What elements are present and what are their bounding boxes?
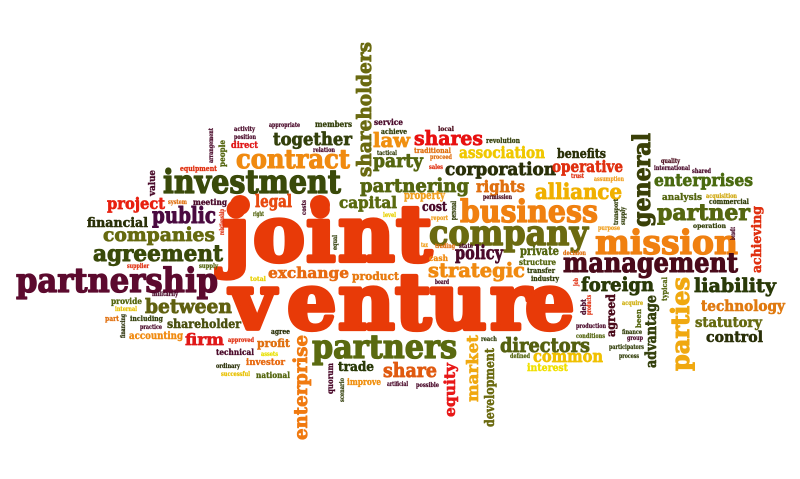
middle words: policy — [455, 242, 504, 264]
lower centre words: possible — [416, 382, 439, 389]
word: partners: partners — [312, 327, 457, 366]
right upper words: achieving — [750, 206, 765, 273]
right upper words: trust — [571, 173, 584, 180]
left words: between — [145, 294, 232, 318]
middle words: industry — [531, 274, 560, 283]
word: venture: venture — [228, 257, 575, 348]
upper centre words: rights — [476, 177, 525, 196]
left words: members — [315, 119, 352, 129]
upper centre words: shares — [414, 126, 483, 150]
left words: project — [107, 194, 166, 213]
left words: relationship — [219, 209, 226, 235]
left words: accounting — [129, 331, 183, 342]
upper centre words: traditional — [414, 146, 451, 155]
left words: financing — [120, 313, 127, 338]
left words: equipment — [180, 164, 218, 173]
left words: appropriate — [269, 122, 300, 129]
middle words: total — [250, 276, 267, 283]
left words: value — [148, 170, 158, 197]
left words: provide — [111, 296, 142, 306]
word: contract: contract — [236, 145, 350, 175]
left words — [87, 119, 352, 380]
right lower words: production — [576, 323, 607, 330]
right upper words: partner — [657, 200, 750, 226]
left words: assets — [261, 351, 279, 358]
left words: position — [234, 134, 257, 141]
middle words: cash — [429, 253, 448, 263]
middle words: equal — [332, 234, 339, 250]
lower centre words: development — [483, 348, 498, 427]
left words: technical — [216, 347, 254, 357]
right lower words: conditions — [576, 333, 606, 340]
right lower words: agreed — [604, 293, 618, 337]
right upper words: acquisition — [706, 193, 738, 200]
lower centre words — [325, 333, 603, 427]
right lower words: finance — [622, 329, 642, 336]
word: company: company — [429, 213, 590, 254]
right lower words: been — [634, 309, 643, 328]
lower centre words: reach — [481, 336, 498, 343]
left words: public — [152, 203, 216, 229]
right upper words: commercial — [709, 197, 749, 206]
right upper words: supply — [620, 207, 627, 225]
middle words: tax — [421, 242, 428, 249]
middle words: trading — [435, 243, 456, 250]
left words: financial — [87, 216, 148, 231]
left words: profit — [257, 337, 291, 350]
right lower words: foreign — [581, 274, 654, 296]
left words: national — [256, 370, 290, 380]
upper centre words: benefits — [557, 147, 606, 162]
right lower words: acquire — [622, 300, 643, 307]
lower centre words: common — [533, 347, 603, 367]
left words: ordinary — [216, 363, 240, 370]
upper centre words: proceed — [430, 154, 453, 161]
word: business: business — [460, 194, 598, 230]
middle words: costs — [301, 199, 308, 215]
lower centre words: trade — [338, 360, 374, 375]
left words: practice — [140, 324, 162, 331]
upper centre words: revolution — [486, 136, 520, 145]
middle words — [250, 192, 587, 286]
lower centre words: quorum — [325, 363, 335, 394]
right lower words: control — [706, 328, 763, 346]
upper centre words: local — [438, 126, 455, 133]
word: shareholders: shareholders — [352, 42, 376, 177]
left words: shareholder — [167, 317, 242, 331]
word: enterprise: enterprise — [290, 335, 312, 440]
upper centre words: service — [374, 117, 403, 127]
left words: agree — [271, 327, 290, 336]
middle words: strategic — [428, 258, 525, 282]
word: parties: parties — [666, 277, 695, 371]
right upper words: analysis — [662, 193, 702, 203]
lower centre words: interest — [527, 363, 568, 374]
lower centre words: improve — [347, 378, 381, 388]
left words: internal — [115, 306, 138, 313]
middle words: transfer — [527, 266, 555, 275]
left words: militarily — [152, 291, 178, 298]
middle words: board — [435, 279, 450, 286]
left words: meeting — [193, 197, 227, 207]
upper centre words: association — [459, 143, 545, 162]
upper centre words: property — [404, 189, 445, 202]
right lower words: technology — [701, 297, 786, 315]
middle words: level — [383, 212, 397, 219]
upper centre words: party — [373, 150, 424, 172]
upper centre words: permission — [483, 194, 512, 201]
left words: companies — [103, 224, 215, 246]
upper centre words: law — [373, 128, 411, 152]
left words: agreement — [93, 241, 224, 267]
word: mission: mission — [595, 223, 738, 263]
upper centre words: capital — [339, 193, 397, 212]
left words: people — [217, 140, 227, 167]
upper centre words: personal — [449, 201, 458, 220]
right upper words: benefit — [730, 227, 737, 240]
lower centre words: market — [463, 334, 482, 402]
upper centre words — [273, 117, 623, 220]
right lower words: typical — [660, 277, 669, 301]
right lower words: job — [573, 278, 580, 287]
left words: firm — [185, 330, 224, 349]
left words: relation — [313, 147, 336, 154]
left words: including — [130, 314, 163, 323]
left words: system — [168, 199, 188, 206]
right upper words: shared — [692, 168, 712, 175]
right lower words: participators — [609, 344, 644, 351]
lower centre words: defined — [510, 353, 531, 360]
right lower words: liability — [694, 275, 777, 297]
lower centre words: share — [383, 358, 437, 382]
lower centre words: scenario — [339, 378, 346, 402]
word: joint: joint — [216, 189, 432, 280]
lower centre words: artificial — [387, 381, 409, 388]
middle words: legal — [255, 192, 292, 212]
left words: approved — [228, 337, 255, 344]
left words: activity — [234, 126, 255, 133]
upper centre words: cost — [422, 200, 447, 215]
upper centre words: partnering — [360, 175, 469, 197]
right lower words: statutory — [695, 315, 763, 331]
right upper words: operation — [693, 223, 727, 230]
upper centre words: alliance — [535, 179, 622, 204]
left words: arrangement — [208, 128, 215, 163]
right upper words: transport — [613, 199, 620, 225]
left words: supplier — [127, 263, 150, 270]
word: investment: investment — [163, 162, 342, 201]
left words: investor — [246, 358, 285, 368]
middle words: decision — [563, 250, 587, 257]
left words: supply — [199, 263, 218, 270]
right upper words: purpose — [598, 225, 620, 232]
upper centre words: operative — [552, 157, 623, 176]
upper centre words: corporation — [445, 159, 556, 180]
right lower words: group — [627, 335, 643, 342]
left words: direct — [231, 141, 259, 151]
word: partnership: partnership — [16, 261, 218, 301]
upper centre words: together — [273, 129, 352, 150]
word: management: management — [563, 248, 738, 279]
dot of i — [310, 195, 330, 215]
middle words: state — [459, 243, 473, 250]
right upper words — [571, 158, 765, 273]
left words: part — [105, 314, 120, 323]
right lower words: debt — [579, 298, 588, 315]
right upper words: international — [654, 165, 691, 172]
right lower words: products — [586, 295, 593, 315]
middle words: structure — [519, 257, 556, 267]
middle words: report — [431, 215, 448, 222]
right upper words: quality — [661, 158, 680, 165]
upper centre words: sales — [429, 164, 444, 171]
dot of j — [230, 195, 250, 215]
lower centre words: equity — [441, 362, 459, 417]
right lower words: advantage — [642, 295, 660, 368]
upper centre words: achieve — [381, 127, 407, 136]
word: general: general — [627, 133, 656, 227]
upper centre words: tactical — [377, 150, 398, 157]
middle words: right — [253, 211, 264, 218]
right upper words: enterprises — [654, 171, 753, 191]
lower centre words: directors — [500, 333, 590, 357]
middle words: exchange — [268, 264, 349, 282]
right lower words: process — [619, 353, 639, 360]
right upper words: assumption — [594, 176, 624, 183]
middle words: product — [352, 270, 400, 283]
left words: successful — [221, 371, 251, 378]
middle words: private — [520, 244, 559, 258]
right lower words — [573, 274, 786, 368]
